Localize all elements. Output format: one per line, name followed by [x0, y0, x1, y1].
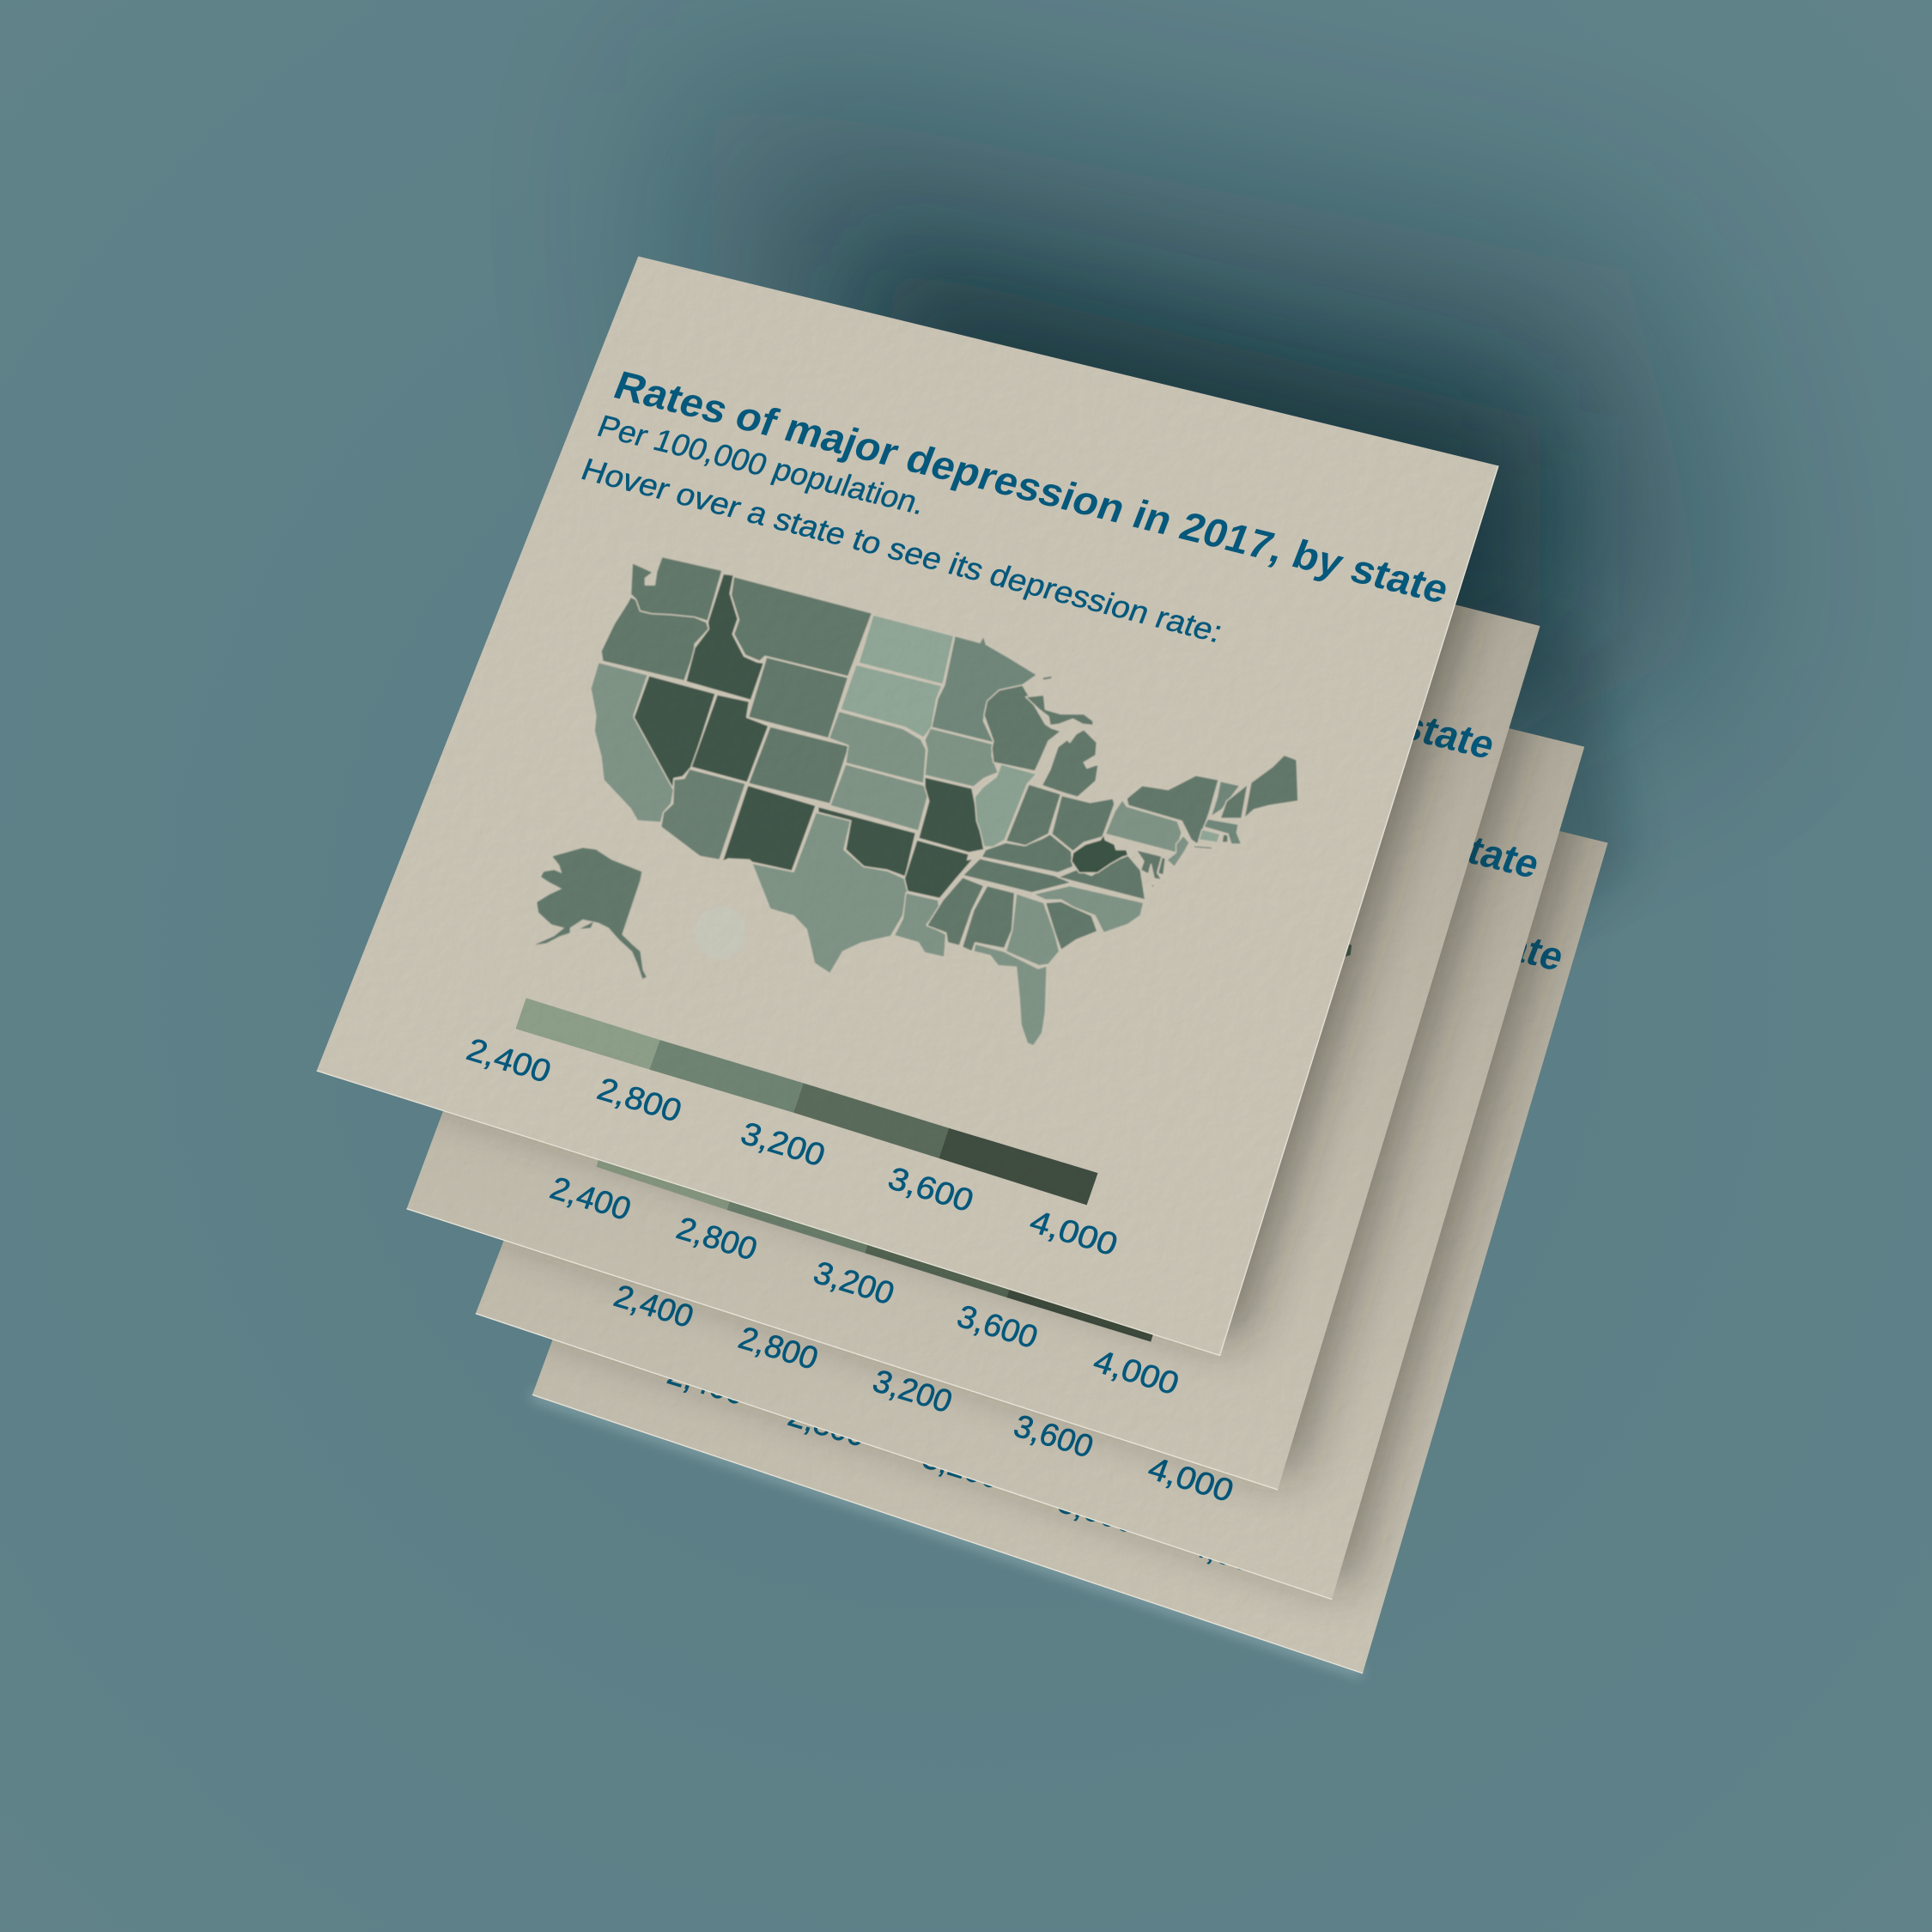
- Minnesota: [932, 635, 1037, 743]
- Wisconsin: [984, 685, 1061, 771]
- Delaware: [1157, 857, 1165, 875]
- sheet 2 legend labels: 3,600: [952, 1297, 1042, 1355]
- legend colour bar: [516, 998, 1098, 1205]
- Missouri: [919, 777, 984, 853]
- Wyoming: [748, 657, 848, 738]
- Alaska: [535, 848, 647, 979]
- sheet 3 legend labels: 3,200: [868, 1363, 957, 1419]
- Arizona: [661, 769, 745, 860]
- sheet 3 legend labels: [610, 1278, 1238, 1509]
- subtitle line 1: Per 100,000 population.: [592, 409, 931, 521]
- sheet 4 legend labels: 2,800: [784, 1397, 872, 1454]
- title: Rates of major depression in 2017, by state: [608, 363, 1455, 612]
- sheet 3 title: Rates of major depression in 2017, by state: [743, 649, 1546, 887]
- sheet 4 (bottom of the stack): [532, 831, 1607, 1673]
- Florida: [974, 944, 1047, 1046]
- New Mexico: [722, 785, 816, 871]
- North Carolina: [1034, 885, 1144, 933]
- legend labels: 3,600: [884, 1160, 979, 1218]
- sheet 1 (top infographic page): [317, 256, 1498, 1355]
- sheet 2 legend labels: 2,400: [546, 1170, 636, 1227]
- Illinois: [975, 764, 1036, 847]
- Georgia: [1005, 894, 1060, 966]
- Massachusetts: [1204, 819, 1242, 844]
- West Virginia: [1072, 834, 1128, 872]
- Alabama: [962, 885, 1015, 951]
- Maine: [1244, 755, 1298, 818]
- Idaho: [686, 574, 764, 701]
- South Dakota: [841, 665, 942, 738]
- Washington: [630, 556, 722, 621]
- Iowa: [925, 728, 998, 787]
- subtitle line 2: Hover over a state to see its depression rate:: [577, 452, 1228, 649]
- sheet 2 legend labels: 4,000: [1089, 1343, 1184, 1401]
- Louisiana: [894, 893, 946, 957]
- Texas: [752, 812, 908, 974]
- Arkansas: [904, 840, 974, 898]
- sheet 2 map fragment: [1340, 943, 1352, 957]
- Utah: [691, 695, 769, 782]
- South Carolina: [1045, 902, 1097, 951]
- sheet 4 legend labels: [666, 1379, 1256, 1575]
- legend labels: 2,400: [462, 1031, 556, 1090]
- sheet 3 legend labels: 2,400: [610, 1278, 698, 1334]
- choropleth map of the United States: [535, 556, 1298, 1046]
- Pennsylvania: [1105, 799, 1182, 853]
- Hawaii (faded): [695, 907, 747, 959]
- Michigan: [1025, 676, 1098, 797]
- Maryland: [1136, 850, 1162, 880]
- sheet 4 legend labels: 4,000: [1187, 1527, 1274, 1583]
- Rhode Island: [1222, 834, 1228, 842]
- Colorado: [748, 726, 849, 804]
- Oregon: [601, 597, 708, 681]
- Virginia: [1058, 855, 1156, 900]
- Nebraska: [829, 711, 927, 783]
- cast shadow of the stack: [690, 86, 1725, 986]
- Montana: [731, 576, 872, 677]
- sheet 3 legend labels: 4,000: [1144, 1450, 1238, 1509]
- New Hampshire: [1220, 784, 1248, 818]
- New Jersey: [1167, 835, 1189, 867]
- New York: [1127, 775, 1218, 849]
- sheet 2 legend bar: [597, 1136, 1161, 1342]
- Tennessee: [963, 859, 1072, 893]
- sheet 2 legend labels: [546, 1170, 1184, 1401]
- Kentucky: [981, 834, 1073, 872]
- sheet 4 legend labels: 3,200: [918, 1439, 1005, 1495]
- Ohio: [1052, 795, 1115, 852]
- Kansas: [830, 764, 929, 831]
- glow along bottom edge of the stack: [532, 1394, 1363, 1674]
- sheet 2 legend labels: 2,800: [672, 1210, 762, 1267]
- sheet 3: [476, 728, 1585, 1599]
- sheet 2 title: Rates of major depression in 2017, by state: [687, 527, 1501, 768]
- legend labels: 4,000: [1025, 1203, 1122, 1262]
- Oklahoma: [818, 806, 916, 877]
- North Dakota: [859, 615, 954, 684]
- sheet 2 legend labels: 3,200: [809, 1254, 899, 1311]
- California: [591, 662, 674, 823]
- sheet 3 legend labels: 3,600: [1009, 1407, 1098, 1464]
- Indiana: [1005, 784, 1061, 846]
- Nevada: [634, 676, 715, 788]
- sheet 4 legend labels: 3,600: [1054, 1483, 1141, 1540]
- Vermont: [1211, 781, 1240, 817]
- legend labels: 2,800: [592, 1071, 686, 1128]
- sheet 4 title: Rates of major depression in 2017, by state: [776, 744, 1571, 980]
- Mississippi: [927, 878, 984, 945]
- legend labels: [462, 1031, 1122, 1262]
- Connecticut: [1199, 829, 1220, 842]
- legend labels: 3,200: [737, 1115, 830, 1173]
- sheet 3 legend labels: 2,800: [734, 1319, 823, 1376]
- sheet 2: [407, 605, 1540, 1489]
- sheet 4 legend labels: 2,400: [663, 1355, 750, 1412]
